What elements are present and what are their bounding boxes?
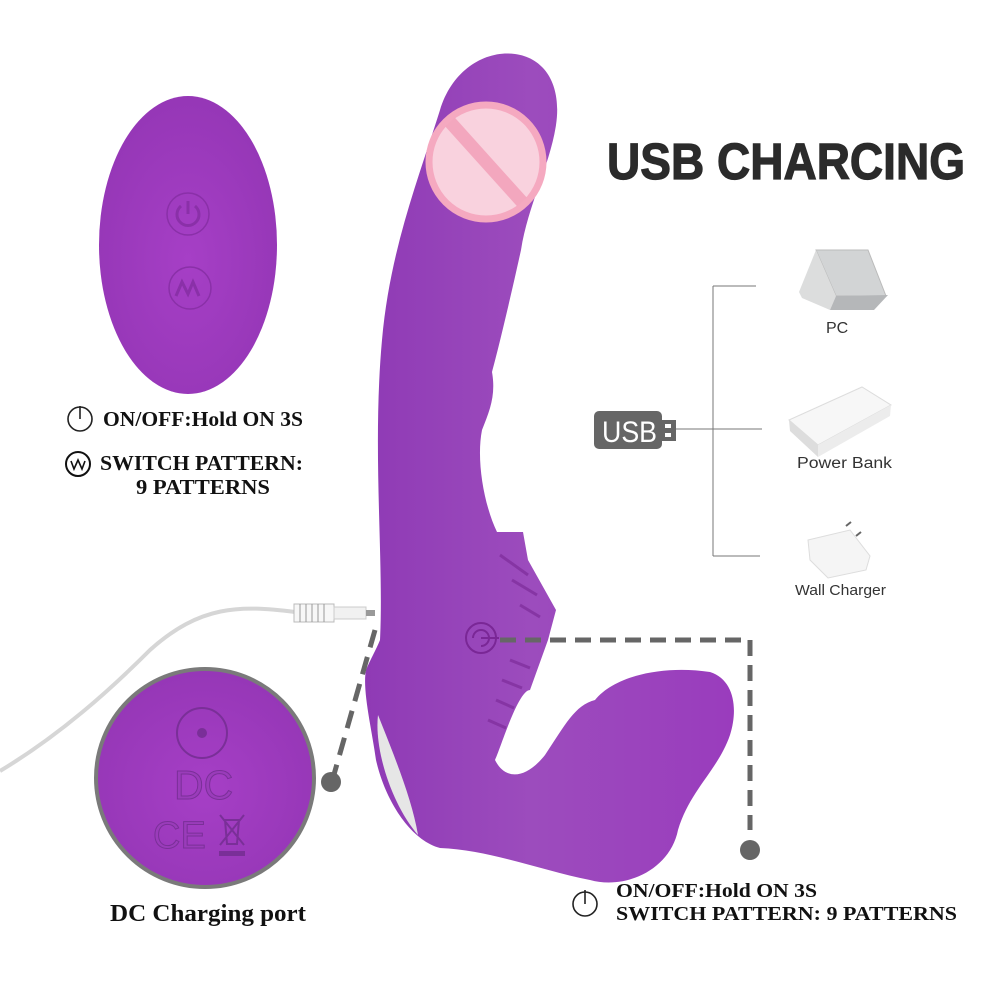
icon: remote power button xyxy=(167,193,209,235)
body button instruction xyxy=(573,880,957,925)
remote control xyxy=(99,96,277,394)
white base accent xyxy=(377,715,418,835)
device: wall charger: Wall Charger xyxy=(795,582,886,599)
ribbed texture xyxy=(488,555,540,728)
device: wall charger xyxy=(795,522,886,599)
dashed connector: DC port xyxy=(321,630,375,792)
DC port detail circle: CE xyxy=(153,815,206,857)
body button instruction: ON/OFF:Hold ON 3S xyxy=(616,880,817,902)
DC port detail circle: DC xyxy=(174,762,233,808)
remote switch pattern instruction: 9 PATTERNS xyxy=(136,475,270,499)
USB plug label xyxy=(594,411,676,449)
censor circle xyxy=(429,105,543,219)
icon: remote pattern button xyxy=(169,267,211,309)
title: USB CHARCING xyxy=(607,133,965,190)
USB plug label: USB xyxy=(602,416,657,449)
icon: body power button xyxy=(466,623,499,653)
device: PC xyxy=(799,250,888,337)
remote on/off instruction: ON/OFF:Hold ON 3S xyxy=(103,407,303,431)
body button instruction: SWITCH PATTERN: 9 PATTERNS xyxy=(616,903,957,925)
dashed connector: body button xyxy=(500,640,760,860)
device: power bank xyxy=(789,387,892,472)
remote switch pattern instruction: SWITCH PATTERN: xyxy=(100,451,303,475)
main product body xyxy=(365,53,734,883)
DC charging port label: DC Charging port xyxy=(110,901,306,927)
DC port detail circle xyxy=(96,669,314,887)
device: power bank: Power Bank xyxy=(797,455,892,472)
device: PC: PC xyxy=(826,320,848,337)
charging cable xyxy=(0,604,375,771)
USB tree diagram xyxy=(594,286,762,556)
remote switch pattern instruction xyxy=(66,451,303,499)
